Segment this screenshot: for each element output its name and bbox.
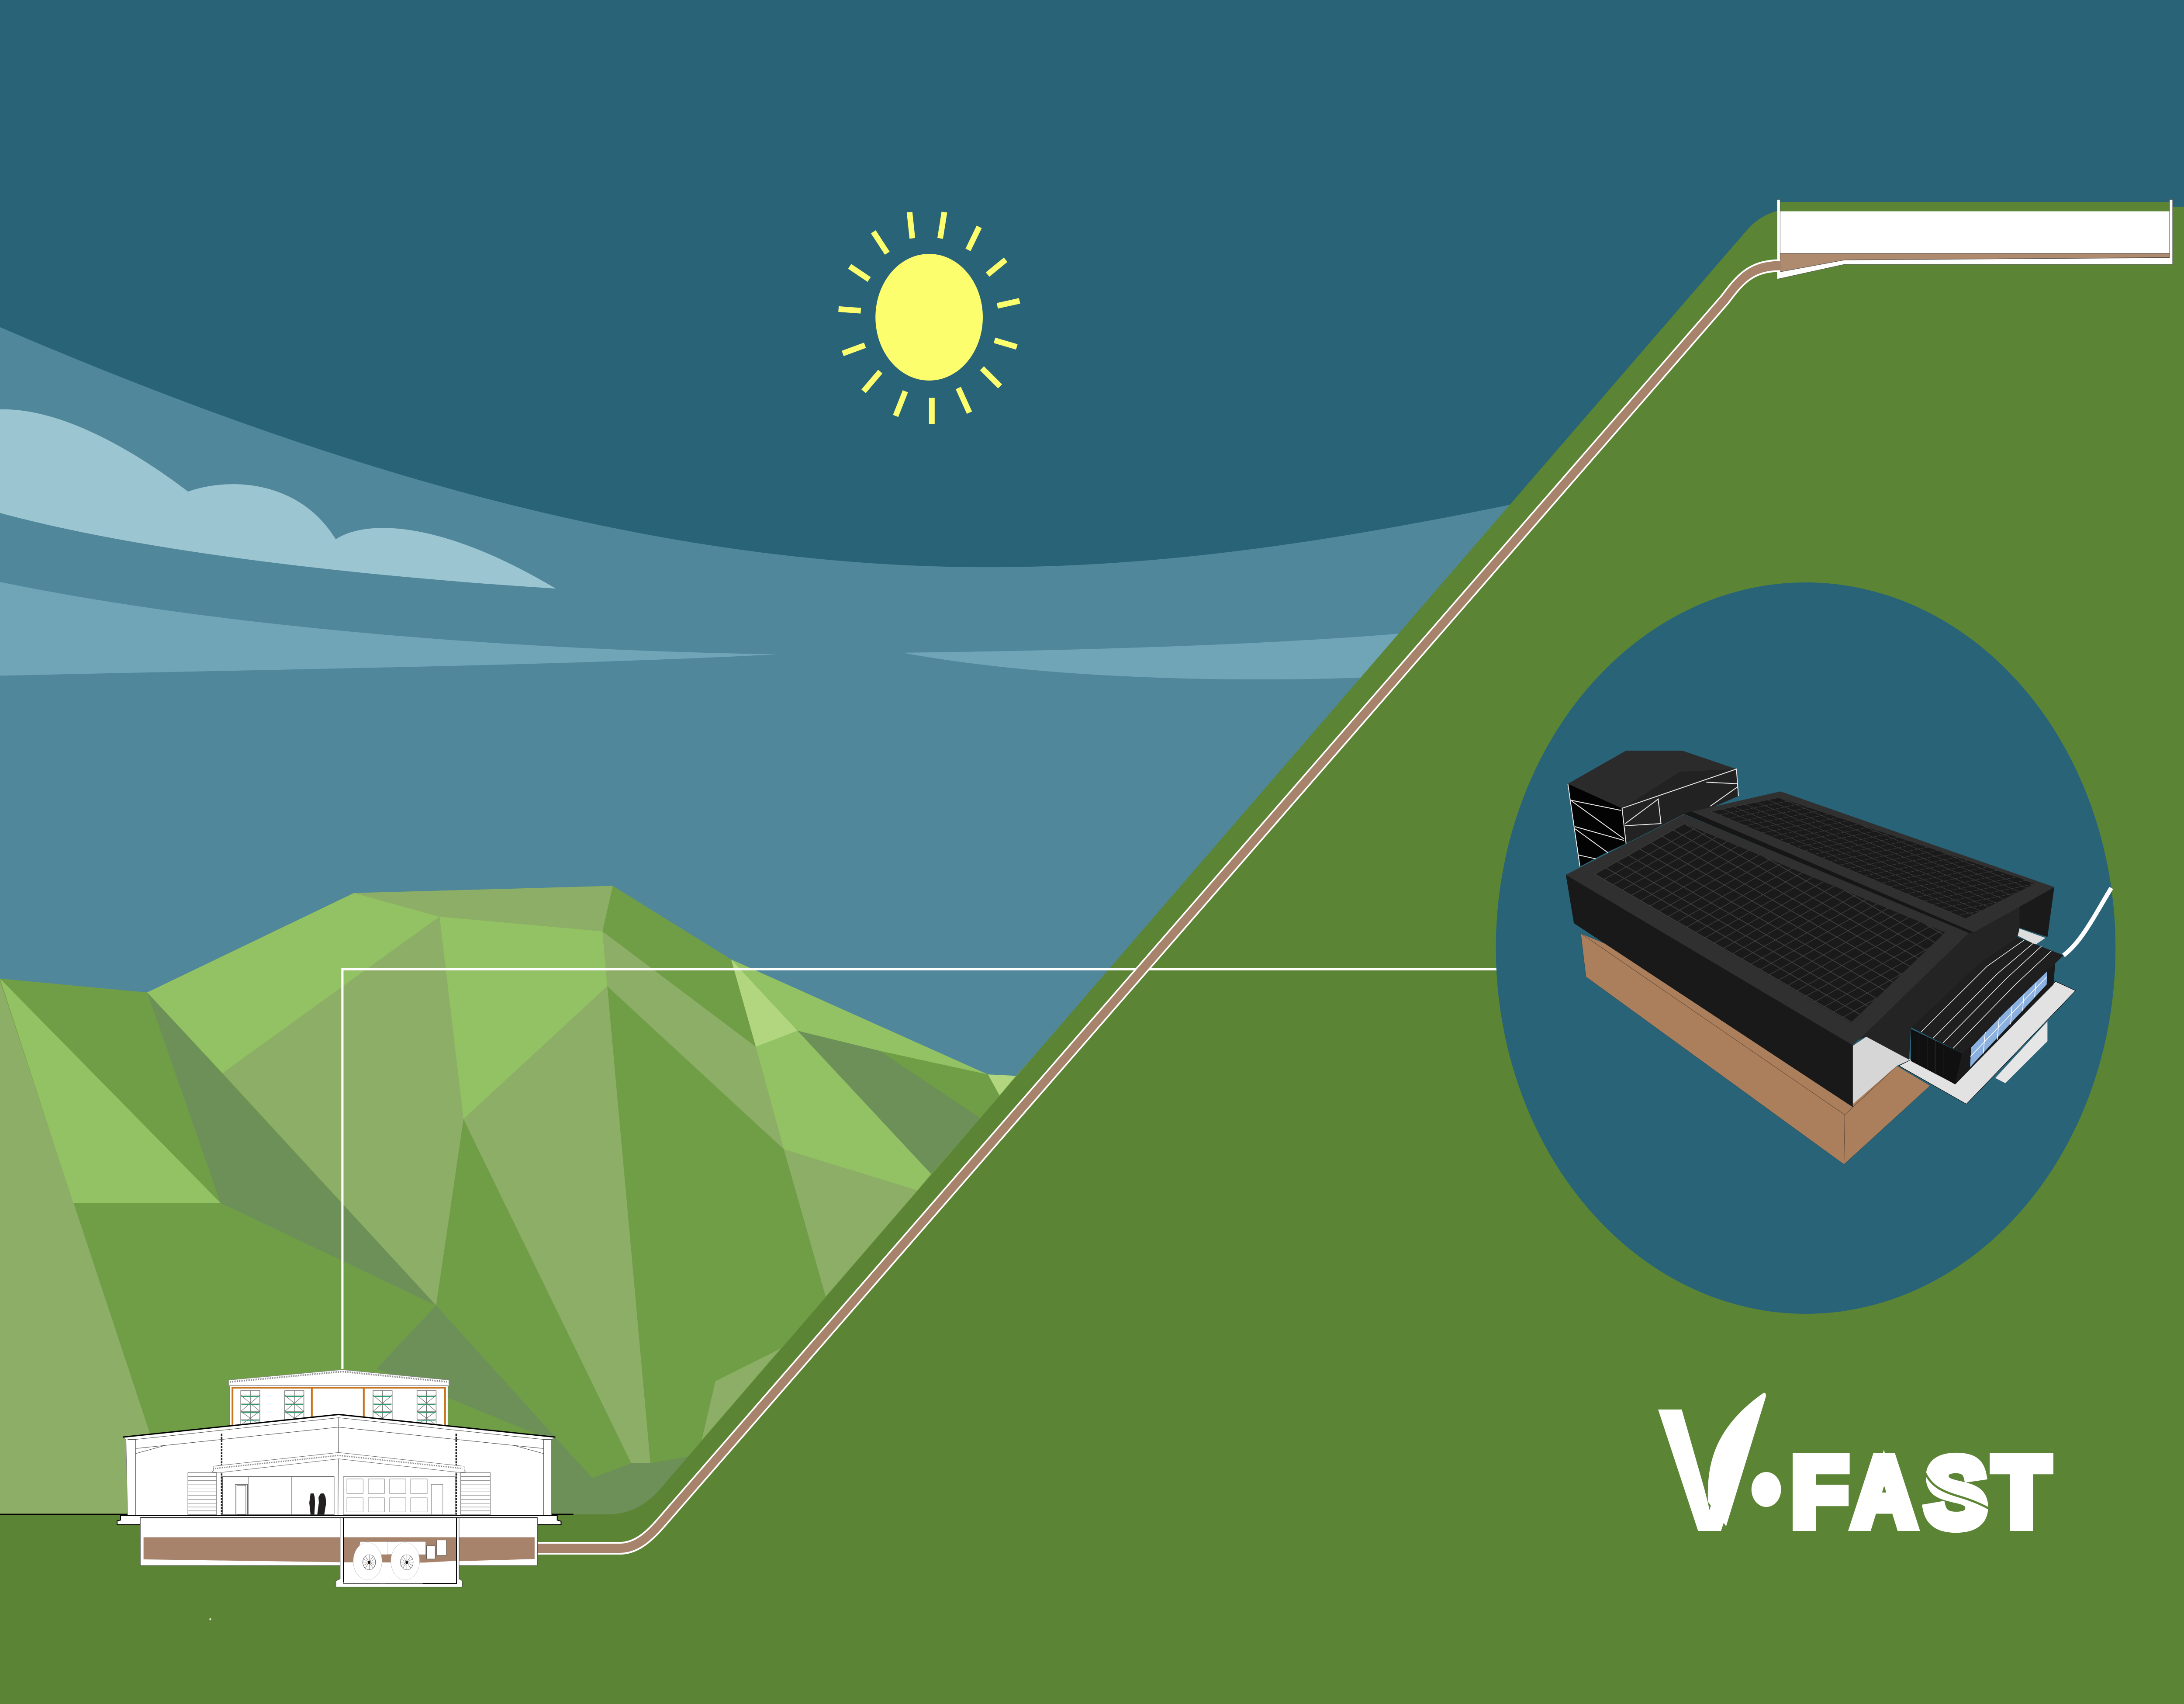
glazing mullions bbox=[1970, 977, 2047, 1056]
logo letter F: F bbox=[1791, 1437, 1848, 1547]
cloud: pale billow bbox=[0, 409, 556, 589]
logo: V-FAST bbox=[1657, 1372, 2049, 1569]
tower right wall bbox=[1622, 769, 1738, 844]
tower roof bbox=[1568, 751, 1736, 808]
main hall walls bbox=[123, 1414, 555, 1515]
cloud: left light streak bbox=[0, 582, 777, 676]
glazing bbox=[1970, 968, 2047, 1067]
reservoir: upper basin bbox=[1777, 200, 2173, 279]
connecting duct bbox=[387, 1542, 425, 1555]
basement water bbox=[144, 1537, 535, 1562]
roller door right bbox=[343, 1477, 455, 1515]
entrance platform bbox=[1899, 981, 2076, 1104]
base floor line bbox=[128, 1516, 552, 1518]
logo notch trim bbox=[1720, 1407, 1747, 1443]
logo dot bbox=[1752, 1472, 1781, 1507]
entrance left bbox=[223, 1477, 334, 1515]
logo letter V: V bbox=[1657, 1372, 1762, 1569]
right roof solar panels bbox=[1711, 797, 2035, 918]
connector line: building to detail circle bbox=[342, 969, 1499, 1369]
main hall inner structure bbox=[128, 1418, 552, 1517]
porch roof seams bbox=[1921, 940, 2052, 1048]
lower platform bbox=[1995, 1021, 2047, 1083]
cloud: right light streak bbox=[902, 633, 1407, 679]
upper pavilion roof bbox=[228, 1370, 449, 1385]
logo leaf bbox=[1708, 1392, 1766, 1526]
foundation edges bbox=[1581, 933, 1897, 1164]
lower pediment bbox=[212, 1452, 466, 1472]
plinth bbox=[117, 1516, 561, 1524]
tower bracing bbox=[1568, 769, 1738, 866]
porch side wall bbox=[1955, 960, 2056, 1084]
pipe: penstock water bbox=[446, 266, 1780, 1548]
outlet valve bbox=[427, 1540, 446, 1559]
main hall roof line bbox=[123, 1414, 555, 1437]
upper pavilion steel frame bbox=[232, 1388, 445, 1425]
panel: detail circle bbox=[1496, 582, 2115, 1314]
basement tank bbox=[140, 1518, 537, 1565]
logo letter T: T bbox=[1994, 1437, 2049, 1547]
porch roof bbox=[1911, 937, 2063, 1053]
pit inner wall bbox=[343, 1518, 456, 1583]
gable wall bbox=[1858, 907, 2019, 1060]
right roof bbox=[1690, 791, 2054, 932]
conduit bbox=[2063, 888, 2111, 956]
porch end wall bbox=[1911, 1029, 1963, 1084]
tower left wall bbox=[1568, 784, 1626, 866]
louvre left bbox=[188, 1472, 217, 1515]
left wall bbox=[1566, 875, 1853, 1107]
logo letter S: S bbox=[1925, 1438, 1987, 1548]
left roof solar panels bbox=[1594, 824, 1945, 1023]
foundation block bbox=[1581, 933, 1930, 1164]
pediment dentils bbox=[215, 1455, 462, 1468]
rear end wall bbox=[2019, 887, 2054, 937]
logo S leaf split bbox=[1924, 1469, 1989, 1509]
speck on ground bbox=[209, 1618, 211, 1620]
wall columns bbox=[221, 1434, 456, 1515]
upper pavilion body bbox=[230, 1385, 448, 1426]
turbine pit bbox=[336, 1518, 462, 1587]
detail: 3D facility model bbox=[1566, 751, 2111, 1164]
white apron under gable bbox=[1853, 1035, 1911, 1104]
ground line bbox=[0, 1514, 574, 1515]
roof ridge bbox=[1683, 811, 1974, 933]
left roof bbox=[1566, 814, 1969, 1045]
louvre right bbox=[461, 1472, 490, 1515]
pipe: penstock white casing bbox=[446, 266, 1780, 1548]
porch end ribs bbox=[1919, 1032, 1943, 1078]
people silhouettes bbox=[309, 1493, 326, 1515]
upper pavilion roof dentils bbox=[230, 1372, 448, 1382]
building: powerhouse section bbox=[117, 1370, 561, 1587]
pit water bbox=[343, 1537, 456, 1562]
icon: sun bbox=[839, 212, 1019, 424]
mountain: low-poly facets bbox=[0, 886, 1074, 1514]
sky: lighter lower band bbox=[0, 327, 1518, 1703]
logo letter A: A bbox=[1852, 1437, 1916, 1547]
small rear apron bbox=[2017, 928, 2046, 945]
